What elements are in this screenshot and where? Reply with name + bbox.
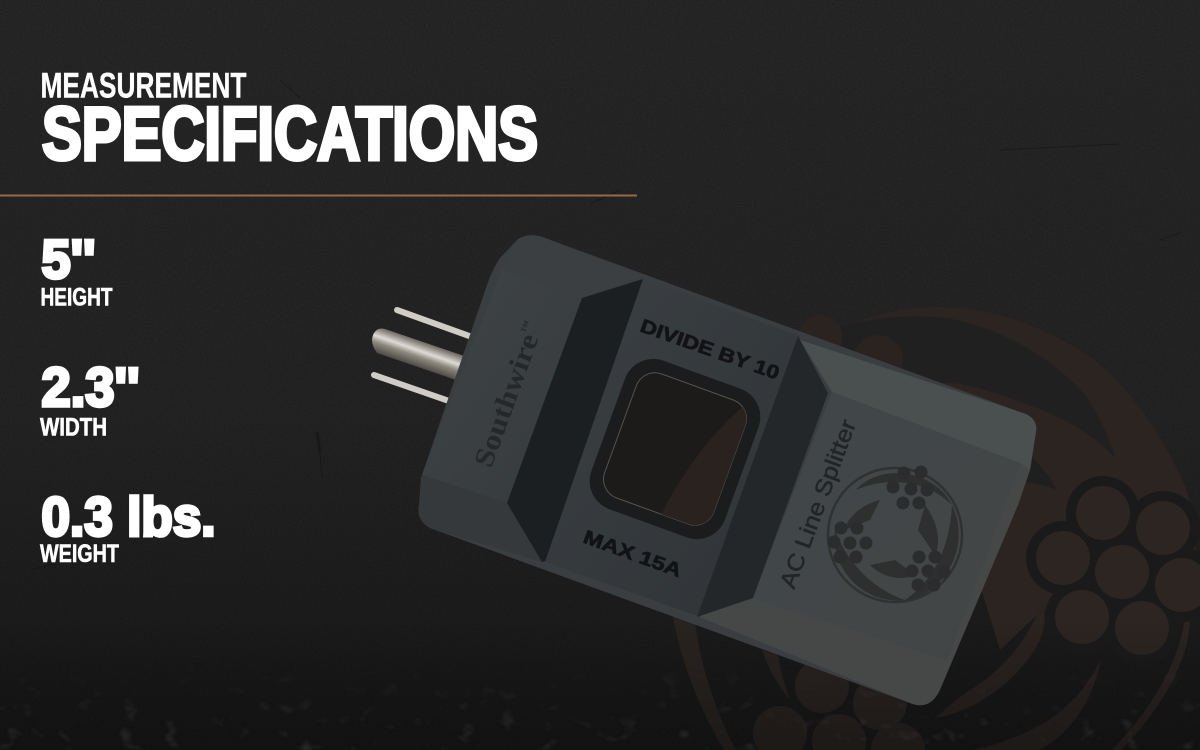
thin right arc xyxy=(1112,612,1190,750)
dark crescent one xyxy=(830,316,1115,458)
embossed text: max 15A: MAX 15A xyxy=(580,527,685,582)
lower swoosh one xyxy=(935,600,1045,718)
device body xyxy=(418,235,1036,705)
main cluster strands xyxy=(1036,486,1200,655)
value: 2.3 inches: 2.3'' xyxy=(42,356,140,418)
left lower bevel xyxy=(418,475,542,562)
embossed text: Southwire: ™ xyxy=(519,319,535,335)
title xyxy=(40,66,538,176)
partly hidden clusters xyxy=(753,315,925,750)
embossed text: AC line splitter: AC Line Splitter xyxy=(774,416,861,592)
window recess ring xyxy=(581,350,769,548)
right end top bevel xyxy=(800,340,1036,470)
viewing window xyxy=(590,358,760,539)
dark crescent two xyxy=(1010,445,1057,490)
upper right brown swoosh xyxy=(828,307,1197,650)
divider rule xyxy=(0,194,637,196)
product: AC line splitter xyxy=(372,235,1036,705)
centre face xyxy=(545,279,800,617)
window opening xyxy=(598,367,752,531)
value: 0.3 lbs: 0.3 lbs. xyxy=(42,486,216,548)
right end lower bevel xyxy=(697,463,1030,705)
left top bevel xyxy=(502,235,643,298)
value: 5 inches: 5'' xyxy=(42,228,96,290)
lower swoosh two xyxy=(970,658,1101,750)
spec: weight xyxy=(40,486,216,568)
embossed logo xyxy=(828,466,962,602)
left face xyxy=(422,270,582,503)
label: weight: WEIGHT xyxy=(40,540,119,568)
plug prongs xyxy=(372,310,472,401)
watermark: three-cluster cable logo xyxy=(672,307,1200,750)
label: height: HEIGHT xyxy=(40,284,112,312)
right end face xyxy=(753,392,1020,660)
title line: measurement: MEASUREMENT xyxy=(40,66,246,106)
label: width: WIDTH xyxy=(40,414,107,442)
left dark channel xyxy=(507,279,650,562)
embossed text: divide by 10: DIVIDE BY 10 xyxy=(637,316,782,384)
bottom grunge xyxy=(2,691,1191,750)
spec: width xyxy=(40,356,140,442)
spec: height xyxy=(40,228,112,312)
logo showing through window xyxy=(661,407,746,526)
halo behind main cluster xyxy=(1026,476,1200,665)
right dark channel xyxy=(697,336,828,617)
embossed text: Southwire: Southwire xyxy=(468,346,539,471)
left arcs xyxy=(672,612,736,750)
title line: specifications: SPECIFICATIONS xyxy=(42,92,538,176)
